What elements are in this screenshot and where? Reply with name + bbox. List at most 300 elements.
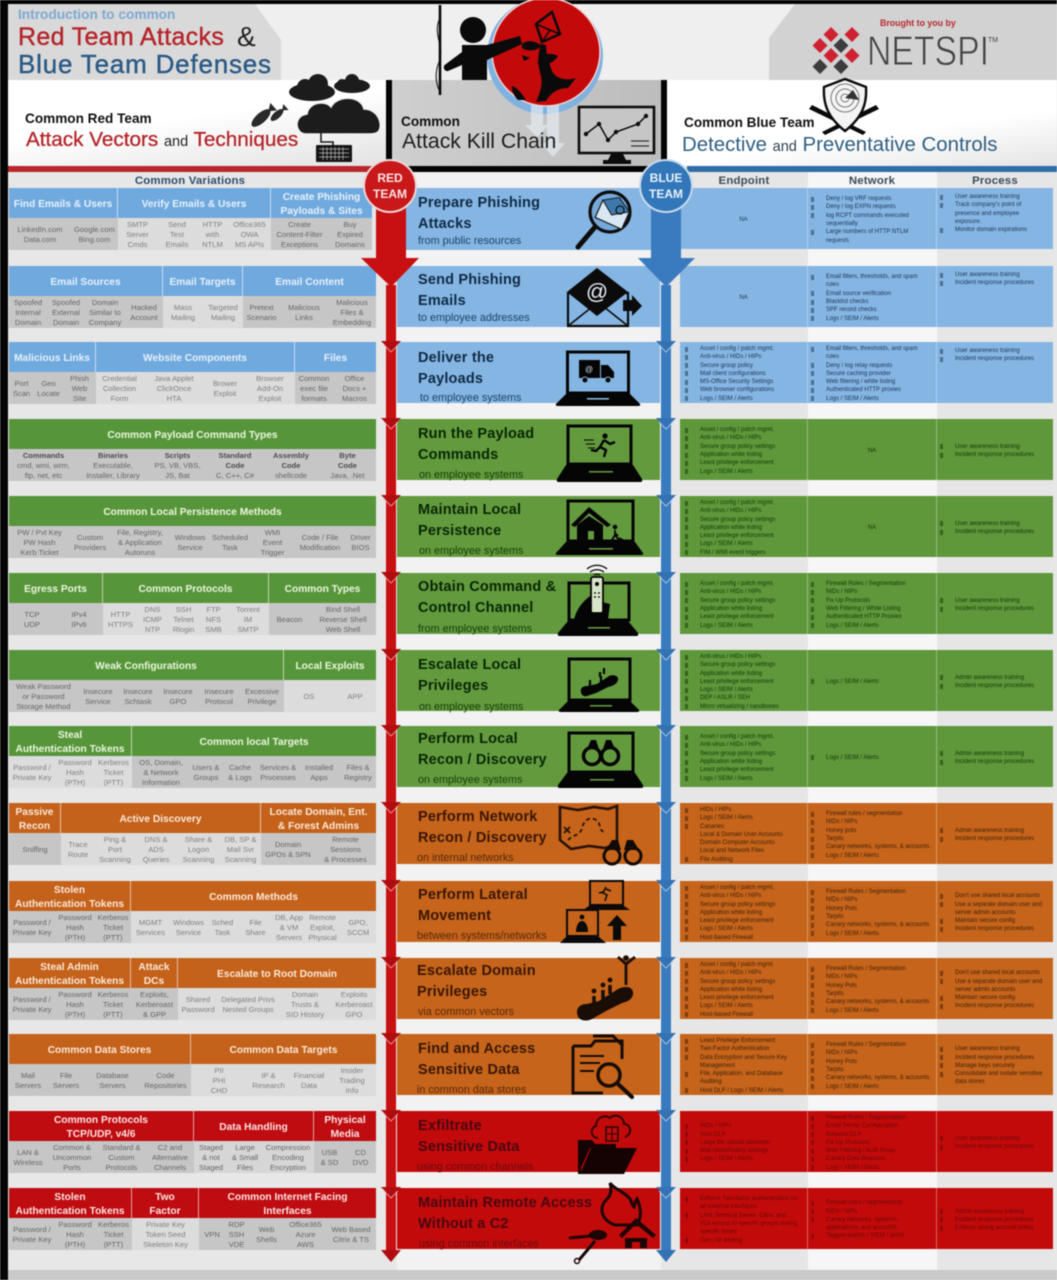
icon: keyboard: [316, 130, 352, 162]
panel: variations row 2: Domain: [53, 318, 79, 327]
kill chain step 9: [397, 803, 660, 864]
panel: variations row 12: PHI: [213, 1076, 225, 1085]
panel: variations row 6: HTTPS: [108, 620, 133, 629]
panel: variations row 3: Port: [15, 379, 28, 388]
kill chain step 8: on employee systems: [418, 774, 522, 786]
kill chain step 3: Payloads: [418, 370, 483, 386]
title ampersand: &: [237, 21, 256, 52]
panel: variations row 9: Active Discovery: [119, 814, 202, 825]
panel: variations row 10: Ticket: [103, 923, 123, 932]
controls row 11: Asset / config / patch mgmt.: [700, 962, 774, 968]
kill chain step 2: to employee addresses: [418, 312, 530, 324]
panel: variations row 7: Local Exploits: [295, 661, 365, 672]
controls row 3: Deny / log relay requests: [826, 363, 892, 369]
panel: variations row 9: [8, 802, 377, 866]
panel: variations row 13: Protocols: [106, 1163, 137, 1172]
panel: variations row 12: Servers: [99, 1081, 126, 1090]
controls row 13: Large file upload detection: [700, 1140, 770, 1146]
controls row 12: Incident response procedures: [955, 1055, 1034, 1061]
controls row 6: User awareness training: [955, 598, 1020, 604]
kill chain step 14: Without a C2: [418, 1216, 509, 1232]
kill chain step 4: on employee systems: [419, 469, 523, 481]
panel: variations row 14: VDE: [229, 1240, 244, 1249]
controls row 2: Incident response procedures: [955, 280, 1034, 286]
panel: variations row 3: Web: [72, 384, 87, 393]
panel: variations row 1: Payloads & Sites: [280, 206, 363, 217]
panel: variations row 14: Common Internet Facing: [228, 1192, 348, 1203]
controls row 1: requests: [826, 238, 849, 244]
controls row 11: Use a separate domain user and: [955, 979, 1042, 985]
heading: attack kill chain: Common: [401, 114, 460, 129]
arrow: blue team: TEAM: [649, 187, 683, 201]
controls row 13: Web Filtering / Auth Proxy: [826, 1148, 895, 1154]
controls row 9: Local & Domain User Accounts: [700, 832, 783, 838]
controls row 2: NA: [739, 295, 748, 301]
controls row 7: Application white listing: [700, 671, 762, 677]
panel: variations row 12: File: [60, 1071, 72, 1080]
controls row 14: Enforce Two-factor authentication on: [700, 1196, 798, 1202]
controls row 13: Firewall Rules / Segmentation: [826, 1115, 906, 1121]
controls row 11: Application white listing: [700, 987, 762, 993]
controls row 14: specific hours: [700, 1229, 737, 1235]
controls row 13: Logs / SEIM / Alerts: [826, 1165, 879, 1171]
panel: variations row 4: PS, VB, VBS,: [154, 461, 200, 470]
controls row 14: Firewall rules / segmentation: [826, 1200, 902, 1206]
panel: variations row 13: Uncommon: [53, 1153, 91, 1162]
panel: variations row 5: PW / Pvt Key: [17, 528, 62, 537]
icon: person holding kite line: [436, 5, 522, 95]
controls row 2: Email source verification: [826, 291, 891, 297]
controls row 5: Least privilege enforcement: [700, 533, 774, 539]
controls row 14: all external interfaces: [700, 1204, 757, 1210]
panel: variations row 13: Data Handling: [219, 1122, 288, 1133]
panel: variations row 8: & Logs: [228, 773, 252, 782]
panel: variations row 3: Locate: [37, 389, 60, 398]
controls row 12: Honey Pots: [826, 1059, 857, 1065]
controls row 7: [680, 650, 1053, 711]
panel: variations row 7: Excessive: [245, 687, 279, 696]
panel: variations row 3: Exploit: [259, 394, 281, 403]
kill chain step 6: [397, 573, 660, 634]
panel: variations row 8: Installed: [305, 763, 333, 772]
panel: variations row 11: (PTT): [103, 1010, 123, 1019]
panel: variations row 9: DNS &: [144, 835, 168, 844]
panel: variations row 13: Ports: [63, 1163, 81, 1172]
kill chain step 7: on employee systems: [419, 701, 523, 713]
panel: variations row 9: DB, SP &: [225, 835, 256, 844]
controls row 3: Anti-virus / HIDs / HIPs: [700, 354, 761, 360]
panel: variations row 6: UDP: [24, 620, 40, 629]
panel: variations row 13: Staged: [199, 1143, 223, 1152]
controls row 4: Logs / SEIM / Alerts: [700, 469, 753, 475]
panel: variations row 8: & Network: [143, 768, 179, 777]
panel: variations row 9: Trace: [68, 840, 88, 849]
panel: variations row 14: Azure: [296, 1230, 315, 1239]
arrow: blue team: [638, 160, 695, 1262]
kill chain step 11: [397, 958, 660, 1019]
panel: variations row 9: Scanning: [183, 855, 214, 864]
panel: variations row 4: shellcode: [275, 471, 307, 480]
icon: map with binoculars: [560, 806, 641, 864]
controls row 4: [680, 419, 1053, 480]
controls row 11: Firewall Rules / Segmentation: [826, 966, 906, 972]
panel: variations row 13: Custom: [108, 1153, 135, 1162]
panel: variations row 11: SID History: [286, 1010, 324, 1019]
panel: variations row 9: Share &: [185, 835, 212, 844]
controls row 11: Incident response procedures: [955, 1003, 1034, 1009]
panel: variations row 5: [8, 495, 377, 558]
panel: variations row 10: Windows: [173, 918, 204, 927]
controls row 2: [680, 266, 1053, 327]
panel: variations row 3: Exploit: [214, 389, 236, 398]
panel: variations row 6: Egress Ports: [24, 584, 87, 595]
panel: variations row 9: Domain: [275, 840, 301, 849]
icon: shield and swords: [809, 79, 879, 135]
panel: variations row 9: & Processes: [324, 855, 367, 864]
panel: variations row 9: Port: [108, 845, 122, 854]
panel: variations row 14: Citrix & TS: [333, 1235, 369, 1244]
controls row 11: Logs / SEIM / Alerts: [700, 1003, 753, 1009]
panel: variations row 13: DVD: [352, 1158, 369, 1167]
panel: variations row 8: Ticket: [104, 768, 123, 777]
kill chain step 2: Send Phishing: [418, 272, 521, 288]
panel: variations row 9: Passive: [16, 807, 53, 818]
panel: kill chain heading background: [392, 80, 661, 166]
panel: variations row 12: Financial: [294, 1071, 324, 1080]
panel: variations row 1: Expired: [337, 230, 363, 239]
title line two: Blue Team Defenses: [18, 49, 272, 79]
kill chain step 10: Perform Lateral: [418, 887, 528, 903]
panel: variations row 6: Torrent: [236, 605, 260, 614]
controls row 7: Anti-virus / HIDs / HIPs: [700, 654, 761, 660]
panel: variations row 7: Weak Password: [16, 682, 71, 691]
kill chain step 6: Control Channel: [418, 600, 533, 616]
panel: variations row 6: FTP: [206, 605, 221, 614]
controls row 13: Email Server Configuration: [826, 1123, 898, 1129]
panel: variations row 11: Shared: [186, 995, 210, 1004]
controls row 4: NA: [868, 448, 876, 454]
panel: variations row 8: [8, 725, 377, 788]
panel: variations row 1: Data.com: [24, 235, 56, 244]
panel: variations row 11: Password /: [13, 995, 51, 1004]
arrow: red team: RED: [377, 171, 403, 185]
controls row 1: exposure.: [955, 219, 981, 225]
panel: variations row 9: Sniffing: [22, 845, 48, 854]
panel: variations row 5: Service: [177, 543, 203, 552]
heading: endpoint: Endpoint: [719, 175, 769, 187]
panel: variations row 1: HTTP: [203, 220, 222, 229]
controls row 3: Incident response procedures: [955, 356, 1034, 362]
controls row 6: Logs / SEIM / Alerts: [826, 623, 879, 629]
panel: variations row 4: Binaries: [98, 451, 128, 460]
controls row 3: Asset / config / patch mgmt.: [700, 346, 774, 352]
panel: variations row 7: Insecure: [163, 687, 193, 696]
panel: variations row 5: Autoruns: [125, 548, 155, 557]
icon: folder and magnifier: [573, 1036, 632, 1097]
controls row 12: User awareness training: [955, 1046, 1020, 1052]
panel: variations row 4: Assembly: [273, 451, 309, 460]
controls row 8: Logs / SEIM / Alerts: [700, 776, 753, 782]
controls row 7: Least privilege enforcement: [700, 679, 774, 685]
panel: variations row 8: Files &: [346, 763, 370, 772]
controls row 4: Application white listing: [700, 452, 762, 458]
kill chain step 5: [397, 496, 660, 557]
controls row 4: User awareness training: [955, 444, 1020, 450]
controls row 10: Logs / SEIM / Alerts: [700, 926, 753, 932]
kill chain step 14: Maintain Remote Access: [418, 1195, 592, 1211]
panel: variations row 11: Kerberoast: [335, 1000, 373, 1009]
panel: variations row 6: Reverse Shell: [319, 615, 367, 624]
panel: variations row 7: Schtask: [124, 697, 152, 706]
controls row 13: Network DLP: [826, 1132, 861, 1138]
panel: variations row 4: JS, Bat: [165, 471, 190, 480]
panel: variations row 1: Find Emails & Users: [14, 199, 112, 210]
controls row 10: Honey Pots: [826, 906, 857, 912]
controls row 1: presence and employee: [955, 211, 1019, 217]
kill chain step 8: [397, 726, 660, 787]
panel: variations row 8: Private Key: [13, 773, 51, 782]
controls row 6: NIDs / NIPs: [826, 589, 857, 595]
kill chain step 1: Prepare Phishing: [418, 195, 540, 211]
panel: variations row 5: & Application: [118, 538, 162, 547]
controls row 4: Incident response procedures: [955, 452, 1034, 458]
controls row 1: NA: [739, 217, 748, 223]
controls row 9: Logs / SEIM / Alerts: [700, 815, 753, 821]
kill chain step 2: Emails: [418, 292, 466, 308]
controls row 7: Logs / SEIM / Alerts: [700, 687, 753, 693]
panel: variations row 10: Service: [176, 928, 201, 937]
controls row 1: log RCPT commands executed: [826, 213, 909, 219]
logo: NetSPI: [812, 27, 998, 74]
panel: variations row 10: SCCM: [347, 928, 369, 937]
panel: variations row 2: Similar to: [89, 308, 121, 317]
controls row 5: [680, 496, 1053, 557]
heading: network: Network: [849, 175, 895, 187]
panel: variations row 2: Links: [295, 313, 313, 322]
panel: variations row 1: Emails: [166, 240, 188, 249]
panel: variations row 7: [8, 649, 377, 712]
panel: variations row 2: Company: [89, 318, 121, 327]
panel: variations row 1: Create Phishing: [283, 192, 360, 203]
panel: variations row 11: Escalate to Root Domain: [217, 969, 337, 980]
panel: variations row 2: Email Content: [275, 277, 344, 288]
panel: variations row 6: SSH: [176, 605, 191, 614]
panel: variations row 6: Common Types: [285, 584, 360, 595]
panel: variations row 6: Rlogin: [173, 625, 194, 634]
kill chain step 12: in common data stores: [417, 1084, 526, 1096]
panel: variations row 10: (PTH): [65, 933, 85, 942]
controls row 12: Firewall Rules / Segmentation: [826, 1042, 906, 1048]
panel: variations row 12: Common Data Stores: [48, 1045, 151, 1056]
controls row 8: Least privilege enforcement: [700, 767, 774, 773]
panel: variations row 2: Domain: [15, 318, 41, 327]
panel: variations row 4: ftp, net, etc: [25, 471, 62, 480]
panel: variations row 8: Kerberos: [98, 758, 129, 767]
kill chain step 13: Exfiltrate: [418, 1118, 482, 1134]
panel: variations row 13: Standard &: [102, 1143, 140, 1152]
controls row 14: Tagged events / SIEM / alerts: [826, 1233, 904, 1239]
panel: variations row 2: Account: [130, 313, 158, 322]
kill chain step 11: Escalate Domain: [417, 963, 536, 979]
panel: variations row 14: [8, 1187, 377, 1250]
panel: variations row 13: C2 and: [158, 1143, 182, 1152]
heading: common variations: Common Variations: [135, 175, 245, 187]
kill chain step 5: Maintain Local: [418, 502, 521, 518]
kill chain step 10: Movement: [418, 908, 491, 924]
icon: laptop with delivery truck: [556, 352, 640, 406]
controls row 9: HIDs / HIPs: [700, 807, 731, 813]
panel: variations row 11: Delegated Privs: [221, 995, 275, 1004]
title: [18, 7, 272, 79]
panel: variations row 9: Sessions: [330, 845, 361, 854]
panel: variations row 11: Domain: [292, 990, 318, 999]
controls row 6: Firewall Rules / Segmentation: [826, 581, 906, 587]
controls row 10: Logs / SEIM / Alerts: [826, 931, 879, 937]
controls row 1: Large numbers of HTTP NTLM: [826, 229, 908, 235]
panel: variations row 5: BIOS: [351, 543, 370, 552]
controls row 7: Micro virtualizing / sandboxes: [700, 704, 779, 710]
panel: variations row 6: TCP: [24, 610, 40, 619]
panel: variations row 12: Mail: [21, 1071, 35, 1080]
panel: variations row 7: Insecure: [204, 687, 234, 696]
panel: variations row 4: Installer, Library: [86, 471, 140, 480]
panel: variations row 11: Kerberos: [98, 990, 128, 999]
panel: variations row 1: OWA: [241, 230, 258, 239]
panel: variations row 3: Java Applet: [154, 374, 194, 383]
panel: variations row 4: Code: [338, 461, 357, 470]
panel: variations row 8: Users &: [192, 763, 220, 772]
panel: variations row 13: Encryption: [270, 1163, 306, 1172]
panel: variations row 9: Locate Domain, Ent.: [270, 807, 367, 818]
controls row 10: Least privilege enforcement: [700, 918, 774, 924]
panel: variations row 10: Stolen: [54, 885, 85, 896]
panel: variations row 12: Research: [252, 1081, 285, 1090]
controls row 4: Least privilege enforcement: [700, 460, 774, 466]
panel: variations row 13: Staged: [199, 1163, 223, 1172]
controls row 1: [680, 188, 1053, 249]
controls row 13: User awareness training: [955, 1136, 1020, 1142]
panel: variations row 10: File: [249, 918, 262, 927]
kill chain step 9: Recon / Discovery: [418, 830, 547, 846]
panel: variations row 8: Hash: [66, 768, 84, 777]
panel: variations row 3: Form: [111, 394, 128, 403]
controls row 9: File Auditing: [700, 857, 733, 863]
panel: variations row 10: (PTT): [103, 933, 123, 942]
controls row 12: Data Encryption and Secure Key: [700, 1055, 787, 1061]
panel: variations row 8: (PTH): [65, 778, 85, 787]
controls row 3: Secure caching provider: [826, 371, 891, 377]
controls row 3: MS-Office Security Settings: [700, 379, 773, 385]
panel: variations row 8: Processes: [260, 773, 296, 782]
panel: variations row 13: Large: [235, 1143, 255, 1152]
panel: variations row 11: Private Key: [13, 1005, 51, 1014]
panel: variations row 3: Office: [345, 374, 364, 383]
kill chain step 1: Attacks: [418, 216, 472, 232]
black frame left: [0, 0, 8, 1280]
controls row 11: Tarpits: [826, 991, 844, 997]
panel: variations row 12: Code: [156, 1071, 175, 1080]
panel: variations row 10: Share: [245, 928, 266, 937]
panel: variations row 9: & Forest Admins: [278, 821, 359, 832]
panel: variations row 8: Groups: [194, 773, 218, 782]
controls row 8: [680, 726, 1053, 787]
panel: variations row 5: Kerb Ticket: [20, 548, 58, 557]
panel: variations row 12: Servers: [53, 1081, 79, 1090]
panel: variations row 8: Password /: [13, 763, 51, 772]
controls row 4: Asset / config / patch mgmt.: [700, 427, 774, 433]
kill chain step 11: via common vectors: [418, 1006, 514, 1018]
panel: variations row 13: Media: [331, 1129, 359, 1140]
panel: variations row 10: [8, 880, 377, 944]
black frame top: [0, 0, 1057, 4]
controls row 2: User awareness training: [955, 272, 1020, 278]
controls row 12: File, Application, and Database: [700, 1071, 783, 1077]
panel: variations row 6: NTP: [145, 625, 160, 634]
controls row 1: Deny / log VRF requests: [826, 196, 891, 202]
panel: variations row 11: Exploits: [341, 990, 367, 999]
panel: variations row 14: Private Key: [146, 1220, 185, 1229]
arrow: blue team: BLUE: [650, 171, 682, 185]
controls row 10: Tarpits: [826, 914, 844, 920]
panel: variations row 9: GPOs & SPN: [265, 850, 311, 859]
panel: variations row 3: Brower: [213, 379, 237, 388]
panel: variations row 2: Targeted: [208, 303, 238, 312]
controls row 9: Local and Network Files: [700, 848, 764, 854]
controls row 8: Secure group policy settings: [700, 751, 775, 757]
panel: variations row 12: IP &: [261, 1071, 276, 1080]
panel: variations row 13: Files: [237, 1163, 253, 1172]
panel: variations row 3: Website Components: [143, 353, 247, 364]
panel: variations row 4: Executable,: [93, 461, 133, 470]
controls row 8: Incident response procedures: [955, 759, 1034, 765]
panel: variations row 4: Scripts: [165, 451, 190, 460]
blue rule: [687, 166, 1057, 172]
icon: sending envelope: [567, 268, 642, 326]
panel: variations row 1: Send: [168, 220, 186, 229]
panel: variations row 12: CHD: [211, 1086, 227, 1095]
panel: variations row 3: Macros: [342, 394, 367, 403]
icon: laptop with escalator: [559, 659, 639, 712]
controls row 12: Tarpits: [826, 1067, 844, 1073]
panel: variations row 6: NFS: [206, 615, 221, 624]
panel: variations row 14: Two: [155, 1192, 175, 1203]
panel: variations row 10: DB, App: [275, 913, 303, 922]
controls row 9: [680, 803, 1053, 864]
panel: variations row 10: GPO,: [348, 918, 367, 927]
kill chain right border: [661, 80, 667, 168]
panel: variations row 14: RDP: [228, 1220, 245, 1229]
panel: variations row 3: Geo: [41, 379, 56, 388]
panel: variations row 9: Remote: [332, 835, 359, 844]
panel: variations row 11: DCs: [144, 976, 164, 987]
controls row 14: Geo / IP limiting: [700, 1238, 742, 1244]
panel: variations row 4: Commands: [23, 451, 64, 460]
panel: endpoint column background: [680, 172, 808, 1270]
panel: variations row 14: Token Seed: [145, 1230, 186, 1239]
panel: variations row 10: Physical: [308, 933, 337, 942]
panel: variations row 12: Servers: [15, 1081, 41, 1090]
controls row 3: User awareness training: [955, 348, 1020, 354]
panel: variations row 13: Compression: [266, 1143, 310, 1152]
controls row 10: Use a separate domain user and: [955, 902, 1042, 908]
panel: variations row 4: Common Payload Command Types: [107, 430, 278, 441]
panel: variations row 3: [8, 341, 377, 404]
controls row 5: Logs / SEIM / Alerts: [700, 541, 753, 547]
panel: variations row 10: Remote: [309, 913, 336, 922]
kill chain step 5: Persistence: [418, 522, 501, 538]
controls row 11: Least privilege enforcement: [700, 995, 774, 1001]
panel: variations row 3: Files: [324, 353, 347, 364]
